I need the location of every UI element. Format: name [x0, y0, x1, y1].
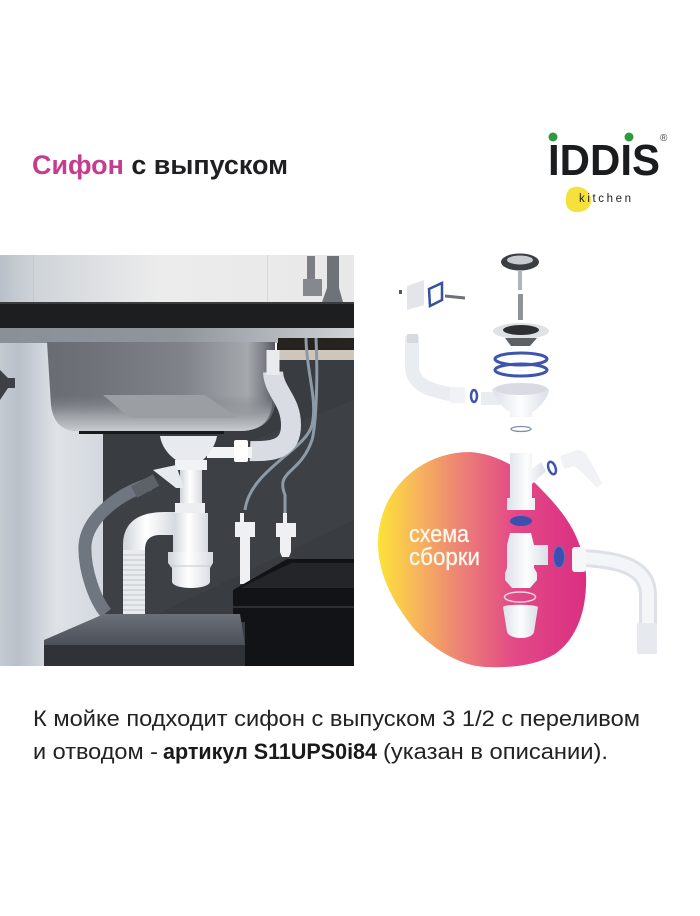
grey bin left — [44, 614, 245, 666]
part: blue seal — [510, 516, 532, 526]
panel: assembly diagram — [378, 254, 657, 667]
logo: IDDIS kitchen — [548, 132, 668, 212]
part: strainer — [501, 254, 539, 320]
brand name: IDDIS — [548, 136, 660, 185]
back wall above counter — [0, 255, 354, 305]
opening behind sink — [277, 338, 354, 350]
dark back panel — [103, 358, 354, 666]
blob label: сборки — [409, 544, 480, 571]
part: siphon trap body — [505, 533, 548, 588]
side branch — [153, 465, 184, 488]
sub-brand: kitchen — [579, 193, 631, 205]
part: drain flange — [493, 323, 549, 346]
part: angled outlet — [560, 450, 602, 488]
side outlet connector — [207, 440, 252, 462]
cabinet interior wall — [0, 340, 103, 666]
photo: siphon installed under sink — [0, 255, 354, 666]
sink bowl — [47, 342, 275, 431]
dark bin right — [233, 559, 354, 666]
registered mark: ® — [660, 133, 668, 144]
corrugated drain outlet — [123, 512, 175, 614]
hinge — [0, 370, 15, 400]
description text — [33, 706, 640, 764]
supply fittings — [235, 513, 296, 584]
part: clear gasket — [504, 592, 536, 602]
part: drain funnel — [481, 382, 549, 417]
countertop underside — [0, 328, 354, 343]
title: Сифон с выпуском — [32, 150, 288, 180]
drain hose — [85, 484, 150, 613]
description text: (указан в описании). — [383, 739, 608, 764]
siphon body — [160, 436, 217, 588]
description text: и отводом - — [33, 739, 158, 764]
part: tee — [507, 453, 558, 510]
blob label — [409, 521, 480, 571]
water supply hoses — [245, 338, 317, 515]
part: trap cup — [503, 605, 538, 638]
countertop — [0, 302, 354, 329]
part: outlet pipe — [572, 547, 657, 654]
description text: К мойке подходит сифон с выпуском 3 1/2 с переливом — [33, 706, 640, 731]
faucet — [303, 256, 343, 302]
gradient blob — [378, 452, 586, 667]
part: small ring — [511, 426, 531, 432]
description text: артикул S11UPS0i84 — [163, 739, 378, 764]
icon: yellow spot — [566, 187, 591, 212]
part: overflow elbow — [407, 334, 477, 403]
part: overflow cover — [399, 280, 465, 310]
overflow corrugated pipe — [250, 372, 291, 451]
blob label: схема — [409, 521, 470, 548]
part: blue rings — [495, 353, 547, 376]
part: blue side seal — [554, 546, 564, 568]
icon: green dots — [548, 132, 634, 142]
